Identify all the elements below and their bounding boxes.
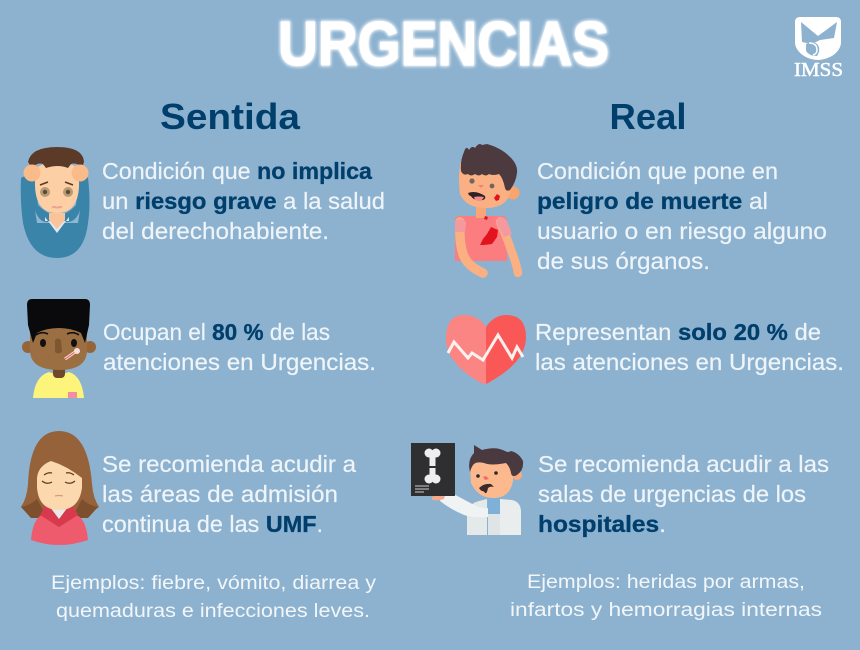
text: Real examples: Ejemplos: heridas por armas, [527, 572, 805, 593]
text: Sentida examples: quemaduras e infecciones leves. [56, 601, 370, 622]
text: Real definition: peligro de muerte al [537, 188, 768, 214]
heading: Sentida: Sentida [160, 96, 301, 137]
text: Real percentage [535, 319, 844, 375]
text: Sentida recommendation [102, 451, 356, 537]
text: Real definition: de sus órganos. [537, 248, 710, 274]
text: Real recommendation [538, 451, 829, 537]
text: Real definition: usuario o en riesgo alguno [537, 218, 827, 244]
text: Sentida percentage: atenciones en Urgencias. [103, 349, 376, 375]
title: URGENCIAS [278, 10, 609, 79]
text: Real recommendation: salas de urgencias de los [538, 481, 806, 507]
text: Real examples: infartos y hemorragias internas [510, 600, 822, 621]
text: Real percentage: Representan solo 20 % de [535, 319, 821, 345]
text: Sentida recommendation: continua de las UMF. [102, 511, 323, 537]
text: Sentida examples [51, 573, 377, 622]
text: Real definition [537, 158, 827, 274]
text: Sentida examples: Ejemplos: fiebre, vómito, diarrea y [51, 573, 377, 594]
text: Sentida definition: un riesgo grave a la salud [102, 188, 385, 214]
text: Real recommendation: Se recomienda acudir a las [538, 451, 829, 477]
text: Sentida definition [102, 158, 385, 244]
text: Real examples [510, 572, 822, 621]
icon: IMSS logo [794, 17, 843, 81]
icon: IMSS logo: IMSS [794, 59, 843, 81]
text: Sentida percentage: Ocupan el 80 % de las [103, 319, 330, 345]
icon: heart with pulse [446, 315, 526, 384]
text: Sentida recommendation: Se recomienda acudir a [102, 451, 356, 477]
text: Sentida definition: del derechohabiente. [102, 218, 329, 244]
title: URGENCIAS [278, 10, 609, 79]
icon: sad woman [21, 431, 99, 545]
text: Sentida definition: Condición que no implica [102, 158, 372, 184]
text: Real recommendation: hospitales . [538, 511, 666, 537]
icon: worried man with headache [21, 147, 90, 258]
icon: boy with thermometer [22, 299, 96, 398]
text: Real definition: Condición que pone en [537, 158, 778, 184]
icon: doctor with x-ray [411, 443, 523, 535]
text: Sentida percentage [103, 319, 376, 375]
heading: Real: Real [610, 96, 686, 137]
text: Real percentage: las atenciones en Urgencias. [535, 349, 844, 375]
icon: injured boy [455, 144, 520, 273]
text: Sentida recommendation: las áreas de admisión [102, 481, 338, 507]
